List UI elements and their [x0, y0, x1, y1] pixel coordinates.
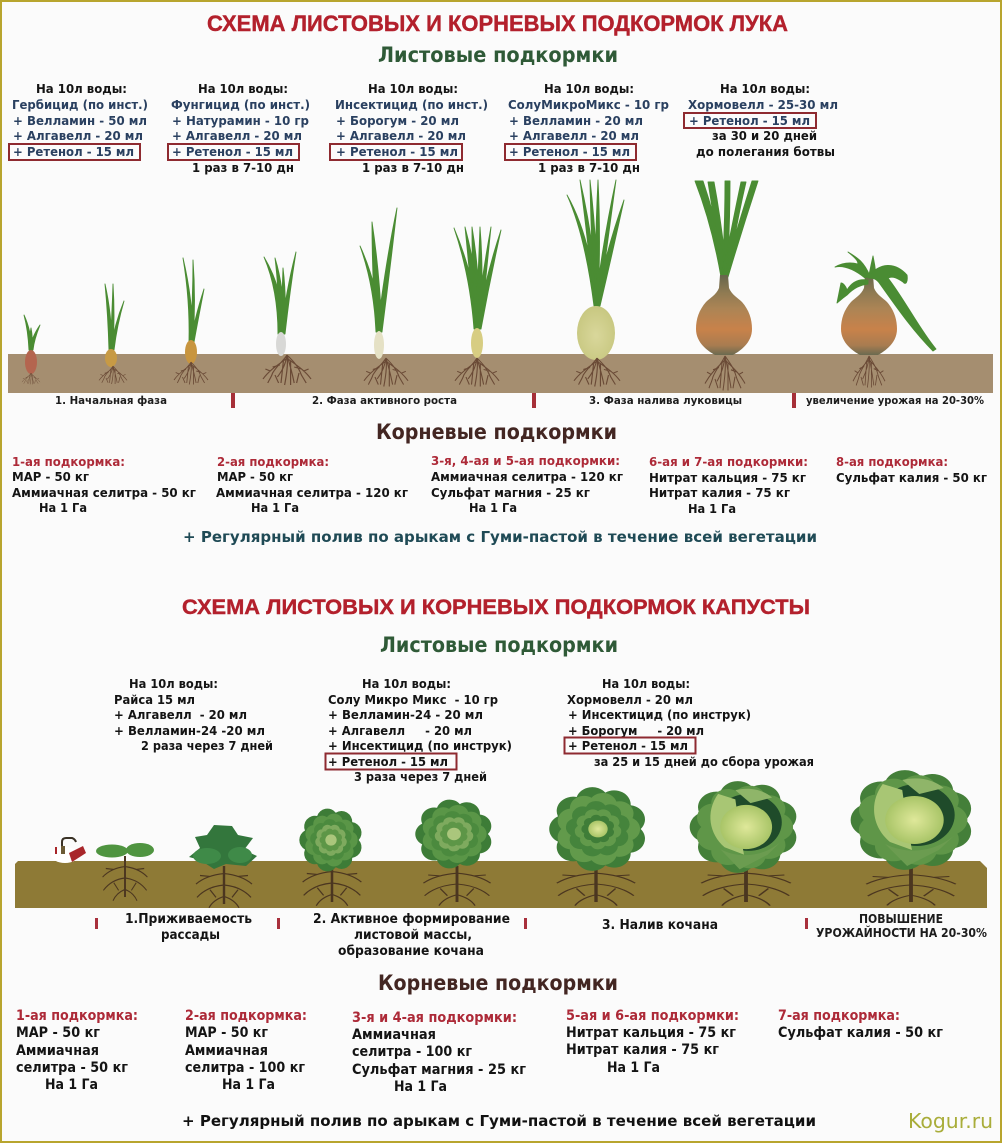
note: regular watering: + Регулярный полив по арыкам с Гуми-пастой в течение всей вегетации [182, 1112, 816, 1130]
phase label 4 [816, 912, 987, 940]
text block: root feeding 2: МАР - 50 кг [217, 470, 293, 485]
text block: root feeding 3 [431, 454, 623, 516]
phase tick 1 [95, 918, 98, 929]
text block: foliar stage 2: + Ретенол - 15 мл [328, 755, 448, 770]
text block: foliar stage 3: На 10л воды: [368, 82, 458, 97]
text block: root feeding 4: Нитрат кальция - 75 кг [649, 471, 806, 486]
text block: foliar stage 4: СолуМикроМикс - 10 гр [508, 98, 669, 113]
text block: root feeding 3: На 1 Га [394, 1079, 447, 1095]
text block: root feeding 2: На 1 Га [251, 501, 299, 516]
text block: root feeding 3 [352, 1010, 526, 1095]
text block: foliar stage 1 [114, 677, 273, 754]
text block: root feeding 3: 3-я, 4-ая и 5-ая подкормки: [431, 454, 620, 469]
cabbage plant 3 [297, 806, 364, 906]
text block: foliar stage 5: за 30 и 20 дней [712, 129, 817, 144]
phase label 4: увеличение урожая на 20-30% [806, 394, 984, 407]
text block: foliar stage 1: Райса 15 мл [114, 693, 195, 708]
text block: root feeding 3: селитра - 100 кг [352, 1044, 472, 1060]
text block: foliar stage 2: + Ретенол - 15 мл [172, 145, 293, 160]
text block: root feeding 5: Сульфат калия - 50 кг [778, 1025, 943, 1041]
text block: root feeding 2: На 1 Га [222, 1077, 275, 1093]
text block: foliar stage 4 [505, 82, 669, 176]
phase label 2: 2. Фаза активного роста [312, 394, 457, 407]
phase tick 4 [805, 918, 808, 929]
text block: foliar stage 2: На 10л воды: [362, 677, 451, 692]
onion plant 7 [567, 180, 624, 386]
text block: root feeding 4 [566, 1008, 739, 1076]
text block: foliar stage 3: + Алгавелл - 20 мл [336, 129, 466, 144]
onion plant 4 [263, 252, 311, 385]
text block: root feeding 3: На 1 Га [469, 501, 517, 516]
text block: foliar stage 3: На 10л воды: [602, 677, 690, 692]
text block: root feeding 2 [216, 455, 408, 516]
phase label 1 [125, 912, 252, 943]
text block: foliar stage 3 [330, 82, 488, 176]
cabbage plant 7 [841, 762, 981, 905]
onion plant 2 [99, 284, 127, 384]
text block: foliar stage 4: + Ретенол - 15 мл [509, 145, 630, 160]
cabbage plant 6 [681, 774, 805, 906]
text block: foliar stage 1: + Алгавелл - 20 мл [13, 129, 143, 144]
text block: foliar stage 3: + Инсектицид (по инструк) [568, 708, 751, 723]
text block: root feeding 4: 6-ая и 7-ая подкормки: [649, 455, 808, 470]
text block: foliar stage 2: + Алгавелл - 20 мл [172, 129, 302, 144]
phase label 2: листовой массы, [354, 928, 472, 943]
text block: root feeding 4 [649, 455, 808, 517]
cabbage plant 1: seedling [96, 843, 154, 901]
text block: foliar stage 1: + Алгавелл - 20 мл [114, 708, 247, 723]
note: regular watering: + Регулярный полив по арыкам с Гуми-пастой в течение всей вегетации [183, 528, 817, 546]
text block: foliar stage 1: + Ретенол - 15 мл [13, 145, 134, 160]
text block: root feeding 2: 2-ая подкормка: [217, 455, 329, 470]
phase label 2: 2. Активное формирование [313, 912, 510, 927]
cabbage plant 2: young leaves [189, 825, 257, 908]
text block: root feeding 4: На 1 Га [688, 502, 736, 517]
phase tick 2 [277, 918, 280, 929]
text block: foliar stage 5: На 10л воды: [720, 82, 810, 97]
text block: root feeding 2: Аммиачная селитра - 120 кг [216, 486, 408, 501]
text block: root feeding 1: селитра - 50 кг [16, 1060, 128, 1076]
text block: root feeding 1: 1-ая подкормка: [12, 455, 125, 470]
text block: foliar stage 1: На 10л воды: [129, 677, 218, 692]
text block: foliar stage 3: Хормовелл - 20 мл [567, 693, 693, 708]
heading: foliar feeding: Листовые подкормки [380, 633, 618, 657]
onion plant 3 [174, 258, 208, 384]
onion plant 1 [22, 315, 40, 384]
onion plant 9 [835, 252, 936, 388]
text block: root feeding 2: 2-ая подкормка: [185, 1008, 307, 1024]
text block: root feeding 1 [12, 455, 196, 516]
text block: root feeding 4: Нитрат калия - 75 кг [566, 1042, 719, 1058]
watermark: Kogur.ru [908, 1109, 993, 1133]
text block: foliar stage 1: 2 раза через 7 дней [141, 739, 273, 754]
phase label 3: 3. Налив кочана [602, 918, 718, 933]
text block: foliar stage 2: + Инсектицид (по инструк) [328, 739, 512, 754]
text block: root feeding 3: Сульфат магния - 25 кг [431, 486, 590, 501]
text block: root feeding 1: На 1 Га [45, 1077, 98, 1093]
text block: root feeding 1: На 1 Га [39, 501, 87, 516]
text block: root feeding 1: 1-ая подкормка: [16, 1008, 138, 1024]
section: cabbage feeding scheme [15, 596, 987, 1130]
onion plant 8 [695, 181, 758, 390]
text block: foliar stage 2: Солу Микро Микс - 10 гр [328, 693, 498, 708]
text block: root feeding 5: 7-ая подкормка: [778, 1008, 900, 1024]
cabbage plant 5 [544, 783, 650, 906]
text block: foliar stage 4: + Алгавелл - 20 мл [509, 129, 639, 144]
text block: foliar stage 3: + Ретенол - 15 мл [336, 145, 458, 160]
text block: root feeding 1: МАР - 50 кг [12, 470, 89, 485]
text block: root feeding 3: Аммиачная селитра - 120 кг [431, 470, 623, 485]
phase tick 2 [532, 393, 536, 408]
phase tick 3 [524, 918, 527, 929]
text block: root feeding 1: МАР - 50 кг [16, 1025, 100, 1041]
text block: foliar stage 1: На 10л воды: [36, 82, 127, 97]
text block: foliar stage 3: Инсектицид (по инст.) [335, 98, 488, 113]
text block: root feeding 1: Аммиачная селитра - 50 кг [12, 486, 196, 501]
text block: foliar stage 3: за 25 и 15 дней до сбора урожая [594, 755, 814, 770]
text block: foliar stage 1 [9, 82, 148, 160]
text block: root feeding 3: Аммиачная [352, 1027, 436, 1043]
title: cabbage scheme: СХЕМА ЛИСТОВЫХ И КОРНЕВЫХ ПОДКОРМОК КАПУСТЫ [182, 596, 810, 619]
text block: root feeding 2: Аммиачная [185, 1043, 268, 1059]
text block: foliar stage 5 [684, 82, 838, 160]
soil strip: cabbage [15, 861, 987, 908]
text block: foliar stage 4: 1 раз в 7-10 дн [538, 161, 640, 176]
section: onion feeding scheme [8, 11, 993, 546]
text block: foliar stage 3: + Борогум - 20 мл [568, 724, 704, 739]
text block: root feeding 4: Нитрат калия - 75 кг [649, 486, 790, 501]
onion plant 6 [454, 227, 501, 386]
soil strip: onion [8, 354, 993, 393]
phase label 1: рассады [161, 928, 220, 943]
text block: foliar stage 3: + Борогум - 20 мл [336, 114, 459, 129]
text block: root feeding 3: Сульфат магния - 25 кг [352, 1062, 526, 1078]
text block: foliar stage 2: + Велламин-24 - 20 мл [328, 708, 483, 723]
text block: foliar stage 4: + Велламин - 20 мл [509, 114, 643, 129]
text block: foliar stage 2: + Натурамин - 10 гр [172, 114, 309, 129]
text block: foliar stage 5: Хормовелл - 25-30 мл [688, 98, 838, 113]
phase label 2 [313, 912, 510, 959]
text block: foliar stage 2: На 10л воды: [198, 82, 288, 97]
text block: foliar stage 1: + Велламин - 50 мл [13, 114, 147, 129]
text block: foliar stage 4: На 10л воды: [544, 82, 634, 97]
text block: foliar stage 2 [326, 677, 512, 785]
text block: foliar stage 2: Фунгицид (по инст.) [171, 98, 310, 113]
text block: foliar stage 2: 3 раза через 7 дней [354, 770, 487, 785]
phase label 3: 3. Фаза налива луковицы [589, 394, 742, 407]
text block: root feeding 5 [836, 455, 987, 486]
text block: foliar stage 2: + Алгавелл - 20 мл [328, 724, 472, 739]
phase tick 1 [231, 393, 235, 408]
text block: foliar stage 2: 1 раз в 7-10 дн [192, 161, 294, 176]
text block: foliar stage 3: 1 раз в 7-10 дн [362, 161, 464, 176]
title: onion scheme: СХЕМА ЛИСТОВЫХ И КОРНЕВЫХ ПОДКОРМОК ЛУКА [207, 11, 788, 36]
text block: root feeding 2 [185, 1008, 307, 1093]
cabbage plant 4 [412, 797, 494, 906]
text block: foliar stage 5: до полегания ботвы [696, 145, 835, 160]
text block: root feeding 4: На 1 Га [607, 1060, 660, 1076]
heading: foliar feeding: Листовые подкормки [378, 43, 618, 67]
heading: root feeding: Корневые подкормки [378, 971, 618, 995]
text block: root feeding 3: 3-я и 4-ая подкормки: [352, 1010, 517, 1026]
icon: planting tool [51, 838, 86, 863]
text block: foliar stage 3: + Ретенол - 15 мл [568, 739, 688, 754]
text block: root feeding 4: 5-ая и 6-ая подкормки: [566, 1008, 739, 1024]
phase label 2: образование кочана [338, 944, 484, 959]
text block: foliar stage 5: + Ретенол - 15 мл [689, 114, 810, 129]
phase tick 3 [792, 393, 796, 408]
phase label 4: УРОЖАЙНОСТИ НА 20-30% [816, 925, 987, 940]
text block: root feeding 5: Сульфат калия - 50 кг [836, 471, 987, 486]
text block: foliar stage 3 [564, 677, 814, 770]
text block: foliar stage 1: + Велламин-24 -20 мл [114, 724, 265, 739]
heading: root feeding: Корневые подкормки [376, 420, 617, 444]
text block: foliar stage 2 [168, 82, 310, 176]
onion plant 5 [360, 208, 408, 386]
text block: root feeding 5: 8-ая подкормка: [836, 455, 948, 470]
text block: root feeding 4: Нитрат кальция - 75 кг [566, 1025, 736, 1041]
phase label 1: 1.Приживаемость [125, 912, 252, 927]
text block: foliar stage 1: Гербицид (по инст.) [12, 98, 148, 113]
text block: root feeding 5 [778, 1008, 943, 1041]
text block: root feeding 1: Аммиачная [16, 1043, 99, 1059]
phase label 4: ПОВЫШЕНИЕ [859, 912, 943, 926]
phase label 1: 1. Начальная фаза [55, 394, 167, 407]
text block: root feeding 2: МАР - 50 кг [185, 1025, 268, 1041]
text block: root feeding 1 [16, 1008, 138, 1093]
text block: root feeding 2: селитра - 100 кг [185, 1060, 305, 1076]
